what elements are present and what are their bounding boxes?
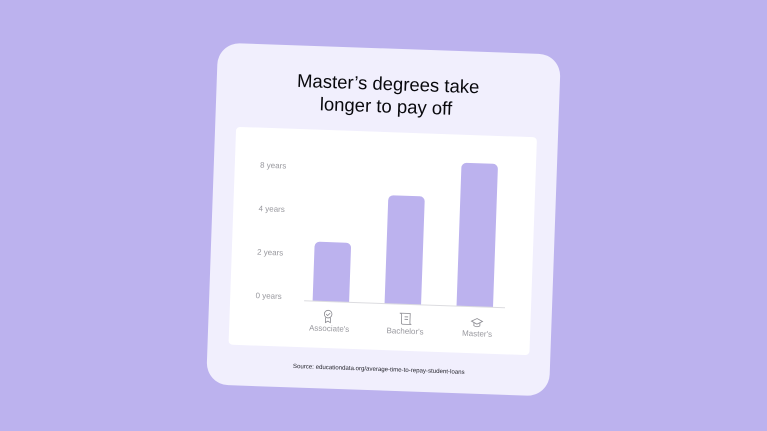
title: Master’s degrees take	[297, 70, 480, 97]
icon: master's graduation cap	[471, 318, 483, 327]
title: longer to pay off	[319, 93, 453, 119]
icon: bachelor's scroll	[399, 313, 412, 325]
icon: associate's award	[324, 310, 332, 323]
bars	[313, 158, 498, 307]
x-axis labels: Bachelor's	[386, 326, 424, 336]
y-axis labels: 0 years	[255, 291, 282, 301]
y-axis labels: 4 years	[258, 204, 285, 214]
axis line	[304, 301, 505, 308]
x-axis labels: Master's	[462, 329, 492, 339]
source note: Source: educationdata.org/average-time-to-repay-student-loans	[293, 363, 465, 376]
y-axis labels: 2 years	[257, 248, 283, 258]
panel: chart	[229, 127, 537, 355]
x-axis labels	[309, 323, 492, 339]
y-axis labels	[255, 161, 286, 301]
title	[296, 70, 480, 120]
y-axis labels: 8 years	[260, 161, 286, 171]
panel: rotated card	[206, 43, 561, 396]
x-axis labels: Associate's	[309, 323, 349, 334]
